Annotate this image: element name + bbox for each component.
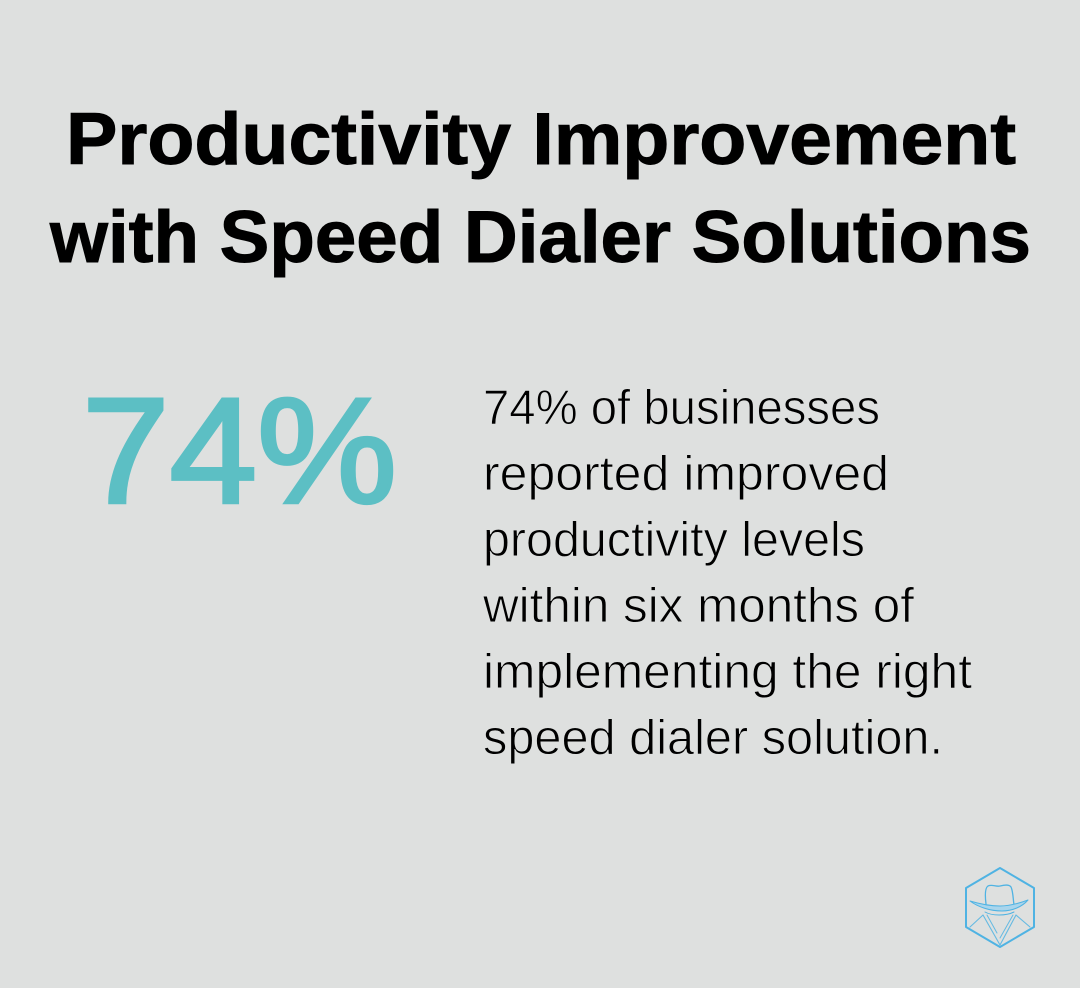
description text: implementing the right: [483, 644, 972, 699]
title: Productivity Improvement: [66, 99, 1016, 180]
description text: [482, 380, 972, 765]
big statistic: 74%: 74%: [82, 366, 397, 534]
description text: reported improved: [483, 446, 889, 501]
description text: speed dialer solution.: [483, 710, 943, 765]
icon: logo, hat and coat in hexagon: [966, 868, 1034, 947]
description text: within six months of: [482, 578, 914, 633]
title: with Speed Dialer Solutions: [49, 197, 1031, 278]
title: [49, 99, 1031, 278]
description text: 74% of businesses: [483, 380, 880, 435]
description text: productivity levels: [483, 512, 865, 567]
